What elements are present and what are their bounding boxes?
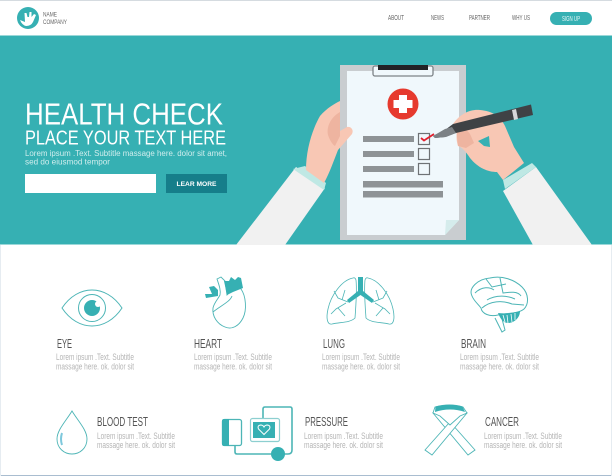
text: eye: Lorem ipsum .Text. Subtitle: [56, 352, 134, 362]
label: brain: BRAIN: [461, 336, 486, 351]
icon: blood drop: [57, 411, 87, 454]
logo: NAME: [43, 12, 57, 18]
logo: [17, 7, 67, 29]
feature: cancer: [425, 405, 562, 455]
nav links: PARTNER: [469, 15, 490, 22]
text: lung: [322, 352, 400, 372]
nav links: WHY US: [512, 15, 530, 22]
text: heart: [194, 352, 272, 372]
sign up button: SIGN UP: [562, 16, 580, 23]
icon: heart: [205, 277, 245, 328]
text: cancer: Lorem ipsum .Text. Subtitle: [484, 431, 562, 441]
feature: brain: [460, 277, 539, 372]
learn more button: [166, 174, 227, 193]
input box: [25, 174, 156, 193]
text: heart: massage here. ok. dolor sit: [194, 362, 272, 372]
hero body text: Lorem ipsum .Text. Subtitle massage here. dolor sit amet,: [25, 149, 227, 158]
feature: lung: [322, 277, 400, 372]
text: heart: Lorem ipsum .Text. Subtitle: [194, 352, 272, 362]
feature: eye: [56, 290, 134, 372]
text: pressure: Lorem ipsum .Text. Subtitle: [304, 431, 383, 441]
icon: brain: [471, 277, 528, 332]
text: blood test: massage here. ok. dolor sit: [97, 440, 175, 450]
label: lung: LUNG: [323, 336, 345, 351]
hero subtitle: PLACE YOUR TEXT HERE: [25, 128, 226, 150]
nav links: NEWS: [431, 15, 444, 22]
text: pressure: [304, 431, 383, 450]
medical cross: [388, 88, 418, 120]
text: lung: Lorem ipsum .Text. Subtitle: [322, 352, 400, 362]
sign up button: [550, 12, 592, 25]
text: blood test: Lorem ipsum .Text. Subtitle: [97, 431, 175, 441]
label: blood test: BLOOD TEST: [97, 414, 148, 429]
hero title: HEALTH CHECK: [25, 98, 223, 132]
hero body text: sed do eiusmod tempor: [25, 158, 110, 166]
icon: blood pressure monitor: [222, 407, 292, 461]
right sleeve: [503, 163, 592, 245]
hero banner: [0, 36, 612, 244]
text: eye: [56, 352, 134, 372]
icon: eye: [62, 290, 122, 326]
icon: awareness ribbon: [425, 405, 475, 455]
nav links: ABOUT: [388, 15, 404, 22]
right hand: [453, 110, 524, 180]
text: blood test: [97, 431, 175, 450]
learn more button: LEAR MORE: [176, 181, 217, 188]
left hand: [306, 101, 353, 183]
checklist: [363, 134, 443, 198]
text: lung: massage here. ok. dolor sit: [322, 362, 400, 372]
hero body text: [25, 149, 227, 166]
label: eye: EYE: [57, 336, 72, 351]
feature: pressure: [222, 407, 383, 461]
text: pressure: massage here. ok. dolor sit: [304, 440, 383, 450]
nav links: [388, 15, 530, 22]
text: brain: massage here. ok. dolor sit: [460, 362, 539, 372]
label: cancer: CANCER: [485, 414, 519, 429]
feature: heart: [194, 277, 272, 372]
text: brain: Lorem ipsum .Text. Subtitle: [460, 352, 539, 362]
left sleeve: [236, 166, 326, 245]
icon: lungs: [327, 277, 394, 324]
illustration: clipboard with hands: [236, 65, 592, 245]
text: cancer: massage here. ok. dolor sit: [484, 440, 562, 450]
text: cancer: [484, 431, 562, 450]
feature: blood test: [57, 411, 175, 454]
pen: [433, 104, 533, 138]
clipboard: [340, 65, 466, 240]
navigation bar: [17, 7, 592, 29]
text: brain: [460, 352, 539, 372]
text: eye: massage here. ok. dolor sit: [56, 362, 134, 372]
logo: COMPANY: [43, 19, 67, 26]
label: pressure: PRESSURE: [305, 414, 348, 429]
label: heart: HEART: [194, 336, 222, 351]
